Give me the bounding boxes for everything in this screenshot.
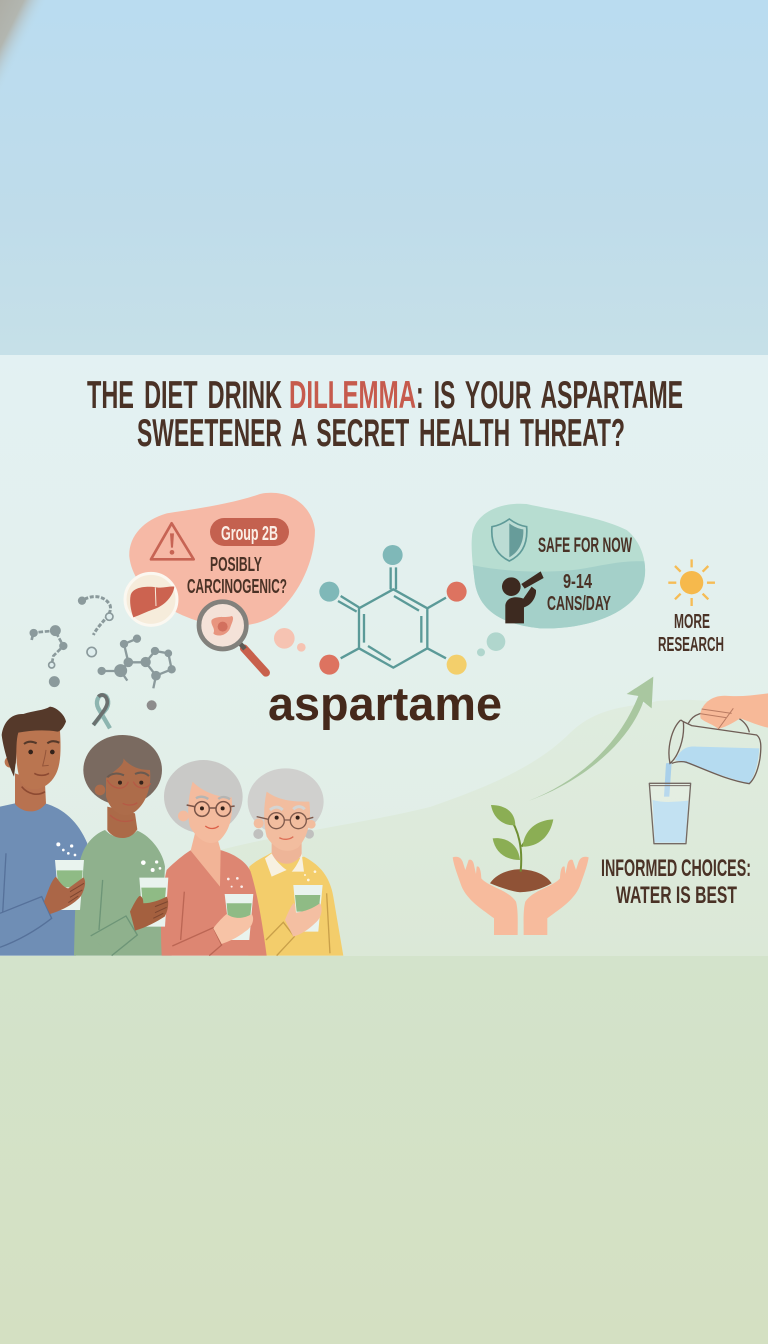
water stream [664, 762, 672, 797]
thought dots [274, 628, 306, 652]
drink: older woman's glass and hand [213, 877, 253, 944]
molecule chain [99, 636, 175, 710]
icon: liver [125, 573, 177, 625]
icon: warning triangle [151, 523, 194, 559]
jug outline [669, 720, 761, 784]
people group holding drinks [0, 707, 343, 956]
text: more research [658, 611, 724, 656]
jug handle [688, 712, 749, 732]
icon: sun [668, 559, 715, 606]
background: lower band [0, 956, 768, 1344]
text: 9-14 cans per day: CANS/DAY [547, 593, 611, 615]
icon: person silhouette with binoculars [502, 571, 544, 623]
icon: awareness ribbon [93, 695, 110, 728]
drink: young man's glass and hand [44, 842, 85, 914]
hand [700, 693, 768, 729]
text: more research: RESEARCH [658, 634, 724, 656]
thought dots [477, 632, 505, 656]
question mark left [30, 626, 67, 686]
person: older woman in coral [161, 760, 267, 956]
icon: hand pouring water from jug [664, 693, 768, 797]
person: woman in green [74, 735, 172, 956]
drink: woman's glass and hand [130, 860, 168, 931]
left hand [453, 857, 518, 935]
drink: older man's glass and hand [285, 870, 323, 937]
icon: glass of water [649, 783, 691, 844]
badge: Group 2B: Group 2B [221, 522, 278, 545]
text: 9-14 cans per day: 9-14 [563, 571, 593, 593]
infographic canvas [0, 0, 768, 956]
person: older man in yellow [248, 768, 343, 956]
background: central panel [0, 355, 768, 956]
heading: aspartame: aspartame [268, 677, 502, 730]
badge: Group 2B [210, 518, 289, 546]
right hand [524, 857, 589, 935]
person: young man in blue [0, 707, 87, 956]
stem [507, 813, 542, 872]
text: informed choices [601, 855, 751, 909]
title: DILLEMMA [289, 374, 416, 417]
icon: magnifying glass [199, 602, 266, 673]
text: safe for now: SAFE FOR NOW [538, 534, 632, 557]
pink blob [129, 493, 315, 626]
text: possibly carcinogenic: POSIBLY [210, 554, 262, 576]
soil [490, 869, 552, 892]
background: sky band [0, 0, 768, 355]
molecule diagram [319, 545, 467, 675]
background: corner smudge [0, 0, 48, 95]
leaves [491, 805, 515, 825]
title: THE DIET DRINK [87, 374, 282, 417]
text: 9-14 cans per day [547, 571, 611, 615]
icon: scattered grey molecules and question marks [30, 597, 175, 710]
background: green hill [220, 700, 768, 956]
icon: seedling in cupped hands [453, 805, 589, 935]
teal blob [467, 504, 650, 633]
text: possibly carcinogenic: CARCINOGENIC? [187, 576, 287, 598]
icon: shield [492, 519, 527, 561]
arrow: rising green [528, 677, 653, 801]
panel: possibly carcinogenic bubble [125, 493, 315, 673]
panel: safe for now bubble [467, 504, 650, 656]
jug water [675, 747, 759, 783]
text: possibly carcinogenic [187, 554, 287, 598]
title [87, 374, 683, 455]
text: more research: MORE [674, 611, 710, 633]
callout: more research [658, 559, 724, 656]
question mark right [79, 597, 113, 657]
